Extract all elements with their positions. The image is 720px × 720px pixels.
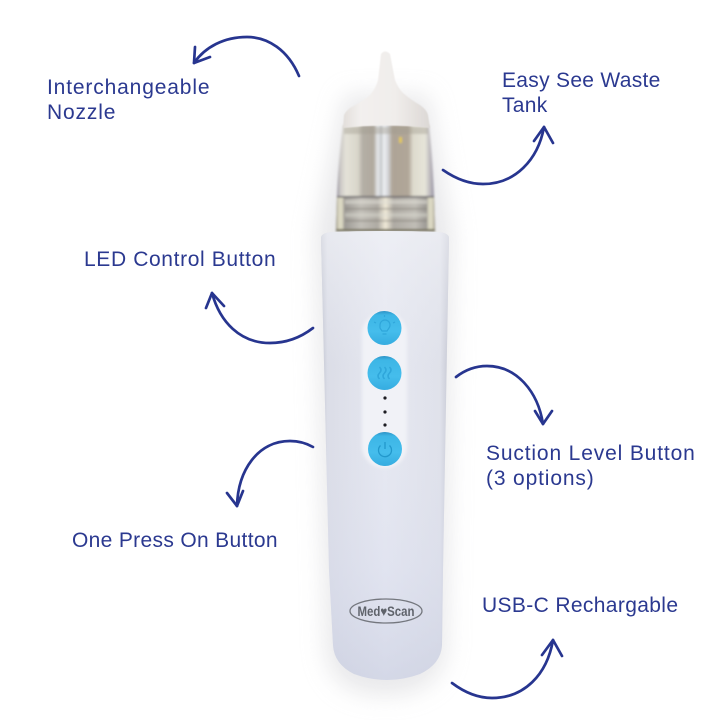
- label: interchangeable nozzle: [47, 76, 210, 124]
- arrow: to interchangeable nozzle: [194, 37, 299, 76]
- label: easy see waste tank: Tank: [502, 94, 548, 117]
- LED button: [368, 311, 402, 345]
- button panel: [362, 311, 407, 468]
- label: suction level button: (3 options): [486, 467, 595, 490]
- arrow: to suction level button: [456, 366, 552, 424]
- nozzle tip: [343, 52, 430, 128]
- indicator dots: [383, 396, 387, 427]
- suction level button: [368, 356, 402, 390]
- label: USB-C rechargable: USB-C Rechargable: [482, 594, 678, 617]
- label: easy see waste tank: [502, 69, 661, 117]
- waste tank: [336, 125, 435, 232]
- label: interchangeable nozzle: Nozzle: [47, 101, 116, 124]
- device shadow: [316, 95, 452, 695]
- power button: [368, 432, 402, 466]
- label: suction level button: [486, 442, 696, 490]
- label: LED control button: LED Control Button: [84, 248, 276, 271]
- logo: MedScan: Med♥Scan: [358, 604, 414, 619]
- logo: MedScan: [350, 599, 422, 623]
- label: interchangeable nozzle: Interchangeable: [47, 76, 210, 99]
- handle body: [321, 231, 449, 680]
- arrow: to waste tank: [443, 127, 553, 184]
- label: suction level button: Suction Level Button: [486, 442, 696, 465]
- label: one press on button: One Press On Button: [72, 529, 278, 552]
- arrow: to USB-C port: [452, 640, 562, 698]
- arrow: to one press on button: [227, 441, 313, 506]
- arrow: to LED control button: [206, 293, 313, 343]
- label: easy see waste tank: Easy See Waste: [502, 69, 661, 92]
